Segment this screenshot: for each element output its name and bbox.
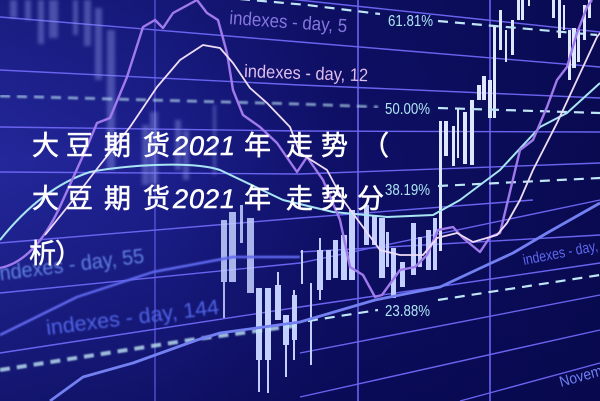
moving average: pink curve <box>45 33 600 255</box>
moving average: day 144 blue curve <box>50 203 600 401</box>
title overlay: 年走势分 <box>244 184 384 214</box>
title overlay: 大豆期货 <box>32 184 170 214</box>
title overlay <box>29 131 389 269</box>
title overlay: 析） <box>29 239 82 269</box>
title overlay: 大豆期货 <box>32 131 170 161</box>
label: 50.00%: 50.00% <box>385 101 430 118</box>
moving average: violet curve <box>0 0 592 297</box>
title overlay: 年走势（ <box>244 131 389 161</box>
moving average: cyan curve <box>0 83 600 240</box>
moving average: day 55 blue curve <box>0 257 300 335</box>
bright candlesticks: lower centre <box>221 205 437 393</box>
faded candlesticks: upper left <box>10 0 216 185</box>
title overlay: 2021 <box>172 131 235 161</box>
label: 23.88%: 23.88% <box>385 303 430 320</box>
bright candlesticks: upper right <box>439 0 591 251</box>
label: 61.81%: 61.81% <box>388 13 433 30</box>
label: indexes day 144: indexes - day, 144 <box>45 296 221 340</box>
label: 38.19%: 38.19% <box>385 182 430 199</box>
title overlay: 2021 <box>172 184 235 214</box>
label: indexes day 5: indexes - day, 5 <box>229 8 348 37</box>
label: indexes day 12: indexes - day, 12 <box>244 61 368 85</box>
